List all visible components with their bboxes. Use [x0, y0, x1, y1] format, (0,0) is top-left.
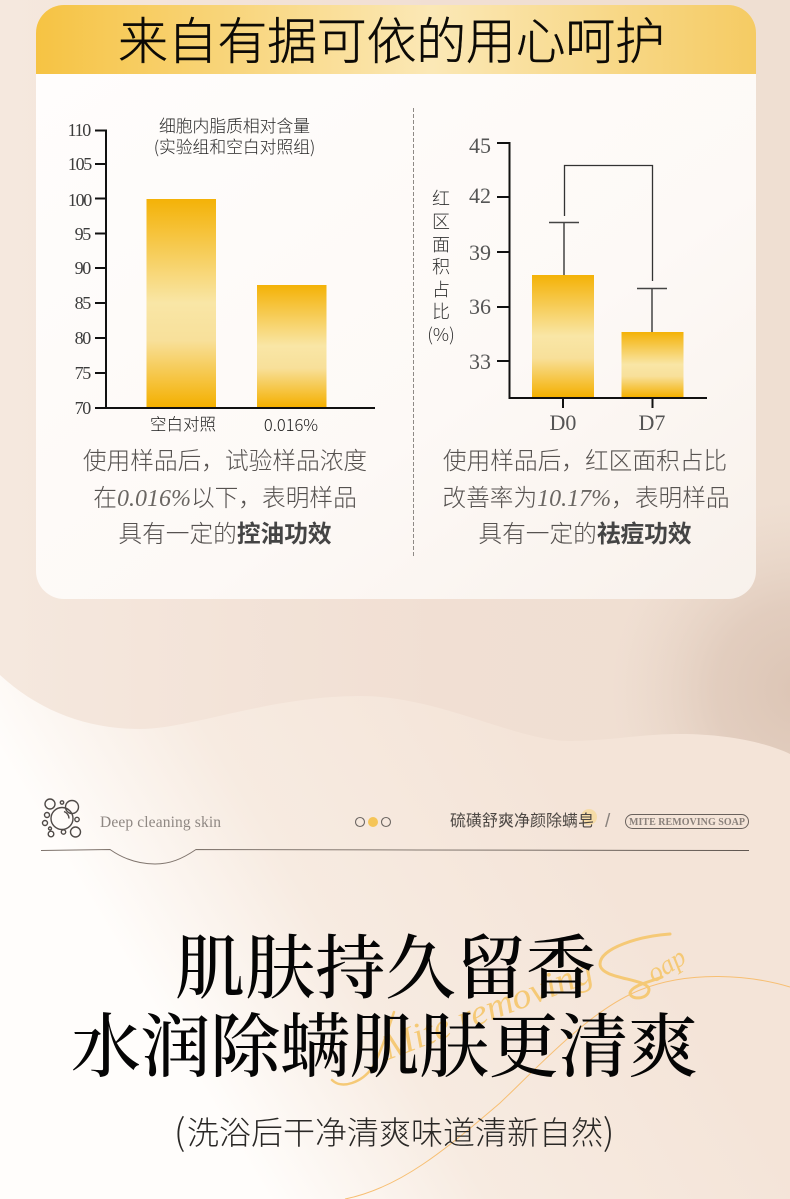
headline	[71, 912, 698, 1092]
y axis title: 区	[432, 208, 450, 234]
y axis	[95, 130, 106, 408]
subheading	[174, 1104, 614, 1156]
y axis labels: 95	[75, 224, 91, 244]
y axis labels: 85	[75, 293, 91, 313]
lower wave background	[0, 675, 790, 1199]
x labels	[550, 410, 665, 435]
x label: concentration: 0.016%	[264, 412, 318, 436]
script: soap: oap	[641, 941, 691, 988]
script: mite removing: Mite removing	[376, 951, 598, 1068]
bar chart: lipid content	[68, 113, 375, 436]
y axis labels: 75	[75, 363, 91, 383]
y axis labels: 36	[469, 294, 491, 319]
section tag: deep cleaning skin: Deep cleaning skin	[100, 814, 221, 831]
caption: acne care: 改善率为10.17%，表明样品	[442, 479, 730, 513]
error bars	[549, 222, 667, 332]
y axis labels: 70	[75, 398, 91, 418]
caption: oil control	[83, 442, 367, 549]
y axis labels: 110	[68, 120, 91, 140]
caption: acne care: 使用样品后，红区面积占比	[443, 442, 727, 476]
caption: oil control: 在0.016%以下，表明样品	[93, 479, 357, 513]
y axis labels: 90	[75, 258, 91, 278]
chart title: 细胞内脂质相对含量	[159, 113, 310, 137]
x axis	[509, 398, 707, 408]
y axis labels: 33	[469, 349, 491, 374]
opening bracket: (	[174, 1104, 185, 1156]
slash separator: /	[605, 811, 611, 832]
y axis labels: 105	[68, 154, 92, 174]
y axis labels	[68, 120, 92, 418]
x labels: D0	[550, 410, 576, 435]
headline: 水润除螨肌肤更清爽	[71, 991, 698, 1092]
significance bracket	[564, 166, 652, 281]
y axis title: 比	[432, 298, 450, 324]
y axis labels: 100	[68, 190, 92, 210]
script tail: swash	[332, 1012, 394, 1084]
y axis title	[427, 185, 455, 347]
header band	[36, 5, 756, 74]
y axis labels: 45	[469, 133, 491, 158]
bar: 0.016%	[257, 285, 326, 407]
pager dots	[356, 817, 390, 827]
y axis labels: 80	[75, 328, 91, 348]
divider with dip	[41, 850, 749, 864]
subheading text: 洗浴后干净清爽味道清新自然	[187, 1108, 603, 1154]
caption: oil control: 具有一定的控油功效	[118, 515, 332, 549]
caption: acne care	[442, 442, 730, 549]
thin golden curve	[345, 976, 790, 1199]
title: 来自有据可依的用心呵护	[118, 2, 665, 74]
icon: bubbles	[42, 799, 80, 837]
x axis	[95, 407, 375, 409]
y axis title: 面	[432, 231, 450, 257]
card body	[36, 74, 756, 599]
caption: acne care: 具有一定的祛痘功效	[478, 515, 692, 549]
closing bracket: )	[603, 1104, 614, 1156]
panel: evidence card	[36, 2, 756, 599]
chart title: (实验组和空白对照组)	[154, 134, 315, 158]
y axis labels	[469, 133, 491, 374]
pill: mite removing soap: MITE REMOVING SOAP	[629, 817, 745, 828]
bar: D7	[622, 332, 684, 397]
y axis labels: 42	[469, 183, 491, 208]
script: soap	[600, 934, 691, 998]
bar: D0	[532, 275, 594, 397]
y axis title: 红	[432, 185, 450, 211]
y axis title: (%)	[427, 321, 455, 347]
caption: oil control: 使用样品后，试验样品浓度	[83, 442, 367, 476]
headline: 肌肤持久留香	[175, 912, 596, 1014]
y axis title: 占	[432, 276, 450, 302]
dark corner shading	[560, 500, 790, 800]
x label: blank control: 空白对照	[150, 411, 216, 435]
y axis title: 积	[432, 253, 450, 279]
product name: 硫磺舒爽净颜除螨皂	[450, 807, 594, 831]
x labels: D7	[639, 410, 665, 435]
y axis	[497, 143, 510, 361]
bar chart: red area ratio	[427, 133, 707, 435]
bar: blank control	[146, 199, 216, 407]
column divider	[412, 108, 414, 558]
y axis labels: 39	[469, 240, 491, 265]
